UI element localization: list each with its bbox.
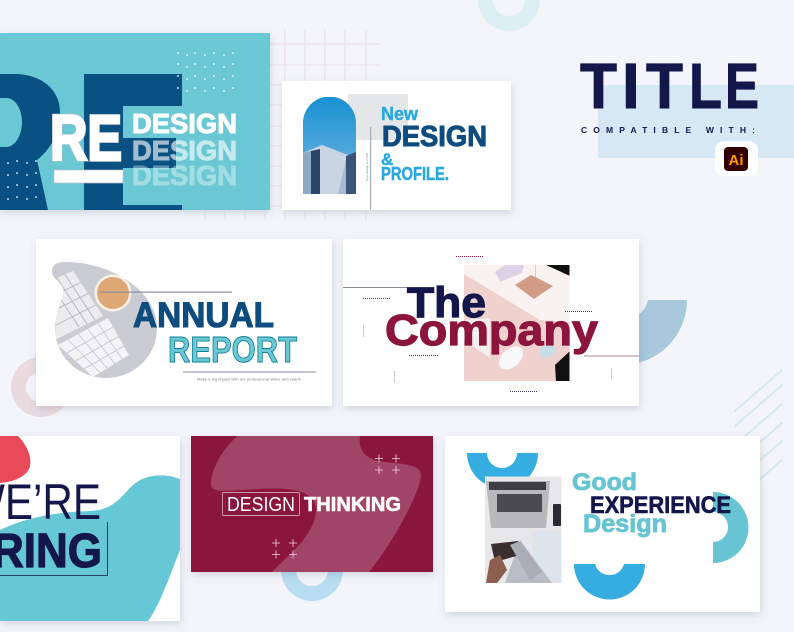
rule: bottom xyxy=(183,372,316,373)
heading: The: The xyxy=(407,279,486,327)
red blob xyxy=(0,436,30,483)
heading: &: & xyxy=(381,150,393,169)
icon: Adobe Illustrator: Ai xyxy=(728,152,744,169)
decorative stripes xyxy=(735,370,782,501)
underline bar xyxy=(54,170,123,183)
dot grid: top right xyxy=(177,52,234,92)
half ring: right teal xyxy=(713,492,748,563)
decorative ring: light blue xyxy=(281,539,343,601)
subtitle: compatible with: COMPATIBLE WITH: xyxy=(581,125,755,135)
tick marks xyxy=(363,265,612,383)
teal blob xyxy=(0,475,180,621)
heading: DESIGN: DESIGN xyxy=(382,121,487,153)
photo: building in arch xyxy=(303,97,356,194)
half ring: bottom blue xyxy=(574,564,645,600)
comma shape xyxy=(211,436,421,572)
heading: REPORT outlined: REPORT xyxy=(168,329,297,370)
heading: Good: Good xyxy=(572,469,637,496)
gray square xyxy=(348,94,408,140)
decorative ring: pink xyxy=(11,357,71,417)
heading: THINKING: THINKING xyxy=(304,494,401,516)
icon: plus marks bottom xyxy=(272,539,297,558)
decorative half ring: blue behind company card xyxy=(600,300,687,365)
title: T xyxy=(646,50,683,122)
small vertical caption: New Design & Profile xyxy=(365,152,369,181)
photo: desk in droplet shape xyxy=(52,262,157,378)
rule: left xyxy=(343,287,409,288)
keyboard xyxy=(58,318,129,377)
title block xyxy=(580,50,759,176)
notepad xyxy=(55,271,103,339)
title: I xyxy=(622,50,640,122)
panel: design thinking card xyxy=(191,436,433,572)
icon: plus marks top xyxy=(375,454,400,474)
heading: RE: RE xyxy=(50,102,122,174)
dot grid: bottom left xyxy=(7,160,37,200)
heading: DESIGN stack xyxy=(133,113,236,186)
big letter R xyxy=(0,74,60,210)
heading: EXPERIENCE: EXPERIENCE xyxy=(590,492,731,519)
text box xyxy=(222,492,300,516)
heading: DESIGN stack: DESIGN xyxy=(132,108,237,139)
panel: we're hiring card xyxy=(0,436,180,621)
photo: pink desk xyxy=(464,265,570,381)
heading: Design: Design xyxy=(583,510,667,538)
panel: the company card xyxy=(343,239,639,406)
half ring: top blue xyxy=(467,453,538,488)
panel: annual report card xyxy=(36,239,332,406)
heading: PROFILE.: PROFILE. xyxy=(381,164,449,184)
heading: DESIGN stack: DESIGN xyxy=(132,160,237,191)
heading: ANNUAL: ANNUAL xyxy=(133,296,274,335)
decorative ring: top teal xyxy=(478,0,540,31)
rule: right xyxy=(584,356,639,357)
heading: New: New xyxy=(381,104,419,124)
heading: Company: Company xyxy=(385,306,599,355)
decorative grid: pink lines xyxy=(205,30,380,220)
icon: Adobe Illustrator xyxy=(715,141,758,176)
panel: new design card xyxy=(282,81,511,210)
title: T xyxy=(580,50,617,122)
heading: RE xyxy=(52,114,122,162)
big letter E xyxy=(84,74,182,210)
heading: RE: RE xyxy=(50,102,122,174)
dotted accents xyxy=(363,256,593,392)
title: E xyxy=(725,50,759,122)
photo: laptop and hands xyxy=(485,476,562,583)
panel: redesign card xyxy=(0,33,270,210)
vertical rule xyxy=(370,127,371,210)
rule: top xyxy=(100,292,232,293)
caption: Make a big impact with our professional slides and charts. xyxy=(197,376,302,382)
heading: DESIGN stack: DESIGN xyxy=(132,135,237,166)
panel: good experience design card xyxy=(445,436,760,612)
outline box xyxy=(0,522,108,576)
title: L xyxy=(689,50,722,122)
title xyxy=(580,50,759,122)
title backing rectangle xyxy=(598,85,794,158)
heading: DESIGN: DESIGN xyxy=(227,494,295,516)
photo: coffee cup xyxy=(94,274,132,312)
